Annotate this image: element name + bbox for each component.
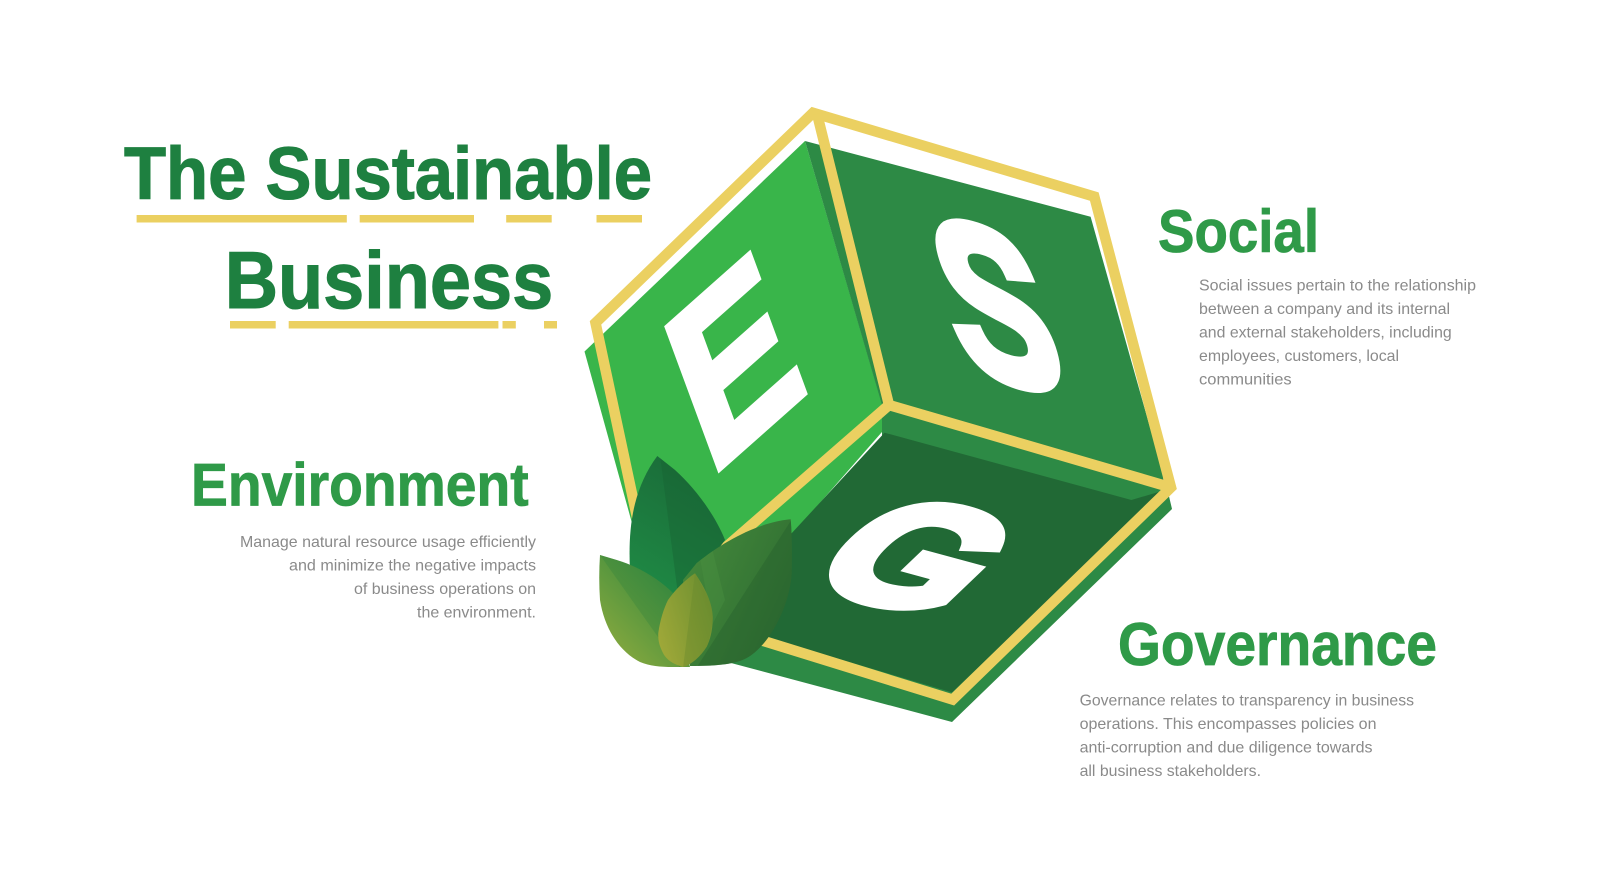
title: Business (225, 236, 553, 326)
section: governance (1080, 611, 1437, 780)
icon: leaves (595, 450, 800, 670)
section: environment (191, 452, 536, 622)
text block: governance: anti-corruption and due diligence towards (1080, 740, 1372, 756)
text block: environment: Manage natural resource usage efficiently (240, 534, 536, 551)
text block: governance: all business stakeholders. (1080, 763, 1261, 780)
letter E: E (642, 205, 826, 520)
leaf: large right (683, 519, 792, 666)
leaf: left (599, 555, 690, 667)
leaf: dark top (630, 456, 725, 594)
text block: environment: and minimize the negative impacts (289, 558, 536, 574)
leaf: small centre (658, 574, 713, 667)
cube face: environment (584, 141, 882, 640)
text block: governance: operations. This encompasses policies on (1080, 716, 1376, 733)
text block: social: and external stakeholders, including (1199, 324, 1452, 342)
cube bottom edge (731, 492, 1172, 722)
text block: governance: Governance relates to transparency in business (1080, 692, 1414, 710)
section: social (1158, 198, 1476, 388)
title: The Sustainable (124, 132, 652, 215)
ESG cube (584, 113, 1172, 722)
text block: environment: the environment. (417, 604, 536, 622)
text block: social: employees, customers, local (1199, 348, 1399, 365)
cube face: governance (730, 433, 1164, 692)
letter G: G (772, 465, 1061, 647)
heading: environment: Environment (191, 452, 529, 518)
heading: social: Social (1158, 198, 1319, 265)
text block: social: Social issues pertain to the relationship (1199, 278, 1476, 294)
heading: governance: Governance (1118, 611, 1437, 678)
text block: social: communities (1199, 372, 1292, 388)
cube yellow frame (596, 113, 1171, 700)
text block: environment: of business operations on (354, 581, 536, 598)
cube face: social (805, 141, 1164, 505)
text block: social (1199, 278, 1476, 388)
text block: governance (1080, 692, 1414, 780)
title (124, 132, 652, 328)
letter S: S (907, 166, 1086, 444)
text block: environment (240, 534, 536, 622)
text block: social: between a company and its internal (1199, 301, 1450, 318)
